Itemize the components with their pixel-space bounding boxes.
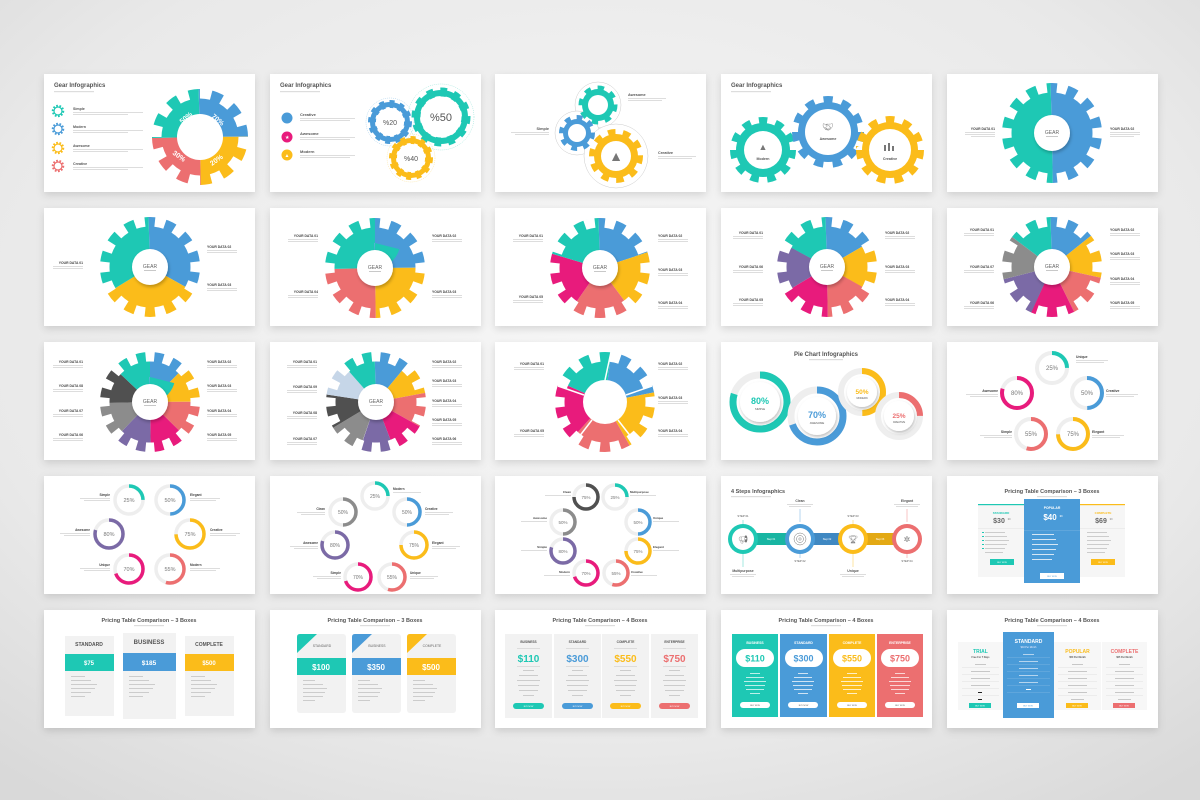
labels: YOUR DATA 02 <box>207 360 231 364</box>
legend list: Modern <box>300 149 315 154</box>
values and labels: Creative <box>210 528 223 532</box>
columns: COMPLETE <box>423 644 442 648</box>
slide 21: pricing 3 boxes <box>44 610 255 728</box>
donut values and labels: Creative <box>1106 389 1119 393</box>
values and labels: Simple <box>100 493 110 497</box>
labels: YOUR DATA 03 <box>1110 252 1134 256</box>
popular column: $40 <box>1043 513 1057 522</box>
standard column: BUY NOW <box>997 562 1007 564</box>
gear: GEAR <box>593 265 607 271</box>
columns: STANDARD <box>569 640 587 644</box>
step labels: Multipurpose <box>732 569 754 573</box>
labels: YOUR DATA 03 <box>207 283 231 287</box>
gears with percentages: %50 <box>430 112 452 124</box>
labels: YOUR DATA 01 <box>59 261 83 265</box>
values and labels: 55% <box>164 567 176 573</box>
legend list: Awesome <box>73 144 90 148</box>
values and labels: 75% <box>581 495 591 500</box>
columns <box>732 634 923 717</box>
values and labels: 50% <box>633 520 643 525</box>
columns: $110 <box>518 654 540 665</box>
slide 2: outline gears <box>270 74 481 192</box>
step labels: Clean <box>795 499 805 503</box>
values and labels: Awesome <box>303 541 318 545</box>
labels: YOUR DATA 02 <box>1110 127 1134 131</box>
values and labels: Creative <box>631 570 643 574</box>
gears: Modern <box>757 157 769 161</box>
columns: $350 <box>367 663 385 672</box>
title: Gear Infographics <box>731 83 783 89</box>
slide 1: gear infographics percentages <box>44 74 255 192</box>
values and labels: Multipurpose <box>630 490 649 494</box>
labels: YOUR DATA 01 <box>739 231 763 235</box>
gear: GEAR <box>820 264 834 270</box>
complete column: $69 <box>1095 518 1107 525</box>
columns: $550 <box>614 654 637 665</box>
labels: YOUR DATA 03 <box>658 396 682 400</box>
values and labels: 25% <box>610 495 620 500</box>
popular column: .99 <box>1059 515 1063 518</box>
labels: YOUR DATA 05 <box>739 298 763 302</box>
legend list <box>282 112 355 160</box>
labels: YOUR DATA 07 <box>970 265 994 269</box>
title: Gear Infographics <box>280 83 332 89</box>
values and labels: 50% <box>164 498 176 504</box>
labels <box>511 93 696 159</box>
columns: POPULAR <box>1065 649 1090 655</box>
labels: Simple <box>537 127 549 131</box>
donut values and labels: Awesome <box>982 389 998 393</box>
labels: YOUR DATA 01 <box>59 360 83 364</box>
columns <box>65 633 234 719</box>
columns: BUY NOW <box>975 706 985 708</box>
donuts: 80% <box>751 396 769 406</box>
labels: YOUR DATA 05 <box>432 418 456 422</box>
values and labels: 50% <box>558 520 568 525</box>
step labels: STEP 04 <box>901 559 913 563</box>
values and labels: 80% <box>330 543 341 549</box>
title: 4 Steps Infographics <box>731 489 785 495</box>
labels <box>513 234 688 309</box>
slide 22: pricing 3 boxes corner <box>270 610 481 728</box>
donuts: CREATIVE <box>893 421 905 424</box>
columns: $550 <box>842 654 862 664</box>
columns: COMPLETE <box>1111 649 1139 655</box>
gears: ▲ <box>609 148 623 164</box>
columns: $185 <box>142 660 157 667</box>
values and labels: 55% <box>611 571 621 576</box>
standard column: STANDARD <box>993 511 1010 515</box>
legend list: Simple <box>73 107 85 111</box>
slide 10: 7-segment gear <box>947 208 1158 326</box>
values and labels: Elegant <box>190 493 202 497</box>
values and labels: 50% <box>402 510 413 516</box>
columns: ENTERPRISE <box>889 641 912 645</box>
gears <box>555 82 648 188</box>
values and labels: Simple <box>537 545 547 549</box>
columns <box>958 632 1147 718</box>
columns: BUY NOW <box>573 706 582 708</box>
columns: BUY NOW <box>750 705 760 707</box>
donuts <box>1002 353 1102 449</box>
legend list: Awesome <box>300 131 319 136</box>
slide 6: 3-segment gear <box>44 208 255 326</box>
donut values and labels: Simple <box>1001 430 1012 434</box>
values and labels: 50% <box>338 510 349 516</box>
slide 16: six donuts <box>44 476 255 594</box>
gear: GEAR <box>369 399 383 405</box>
labels: YOUR DATA 03 <box>207 384 231 388</box>
step labels: STEP 01 <box>737 514 749 518</box>
title: Pricing Table Comparison – 3 Boxes <box>1005 489 1099 495</box>
labels <box>514 362 688 437</box>
labels: YOUR DATA 09 <box>293 385 317 389</box>
columns: BUY NOW <box>1119 706 1129 708</box>
columns: BUY NOW <box>1072 706 1082 708</box>
donuts: AWESOME <box>810 421 824 425</box>
values and labels: 70% <box>123 567 135 573</box>
slide 4: three gears <box>721 74 932 192</box>
labels: YOUR DATA 02 <box>658 362 682 366</box>
labels: YOUR DATA 04 <box>432 399 456 403</box>
step chain: Step 01 <box>767 538 776 541</box>
slide 14: pie chart infographics <box>721 342 932 460</box>
labels <box>288 234 462 298</box>
donut values and labels: 80% <box>1011 391 1024 397</box>
labels: YOUR DATA 06 <box>432 437 456 441</box>
gear <box>330 356 422 448</box>
gears <box>734 100 920 180</box>
donuts: 25% <box>892 413 906 420</box>
complete column: .99 <box>1109 518 1113 521</box>
labels <box>733 231 915 306</box>
gear <box>782 222 872 312</box>
labels: YOUR DATA 02 <box>658 234 682 238</box>
labels: YOUR DATA 04 <box>207 409 231 413</box>
slide 20: pricing 3 boxes popular <box>947 476 1158 594</box>
columns <box>505 634 698 718</box>
values and labels: Modern <box>190 563 202 567</box>
step labels <box>730 499 920 577</box>
slide 11: 8-segment gear <box>44 342 255 460</box>
values and labels: Elegant <box>432 541 444 545</box>
slide 3: interlocked gears <box>495 74 706 192</box>
donut values and labels: 50% <box>1081 391 1094 397</box>
donuts <box>733 371 920 442</box>
labels: YOUR DATA 01 <box>519 234 543 238</box>
step labels: Unique <box>847 569 859 573</box>
columns: STANDARD <box>313 644 332 648</box>
gears: ▲ <box>759 142 767 152</box>
labels: YOUR DATA 02 <box>885 231 909 235</box>
slide 7: 4-segment gear <box>270 208 481 326</box>
donut values and labels: 55% <box>1025 432 1038 438</box>
values and labels <box>60 493 240 573</box>
popular column: POPULAR <box>1044 506 1061 510</box>
columns: $750 <box>663 654 686 665</box>
labels: YOUR DATA 03 <box>885 265 909 269</box>
values and labels: Unique <box>653 516 663 520</box>
legend list: Creative <box>73 162 87 166</box>
values and labels: Clean <box>563 490 571 494</box>
columns: COMPLETE <box>617 640 634 644</box>
values and labels: 75% <box>409 543 420 549</box>
donut values and labels <box>966 355 1138 438</box>
labels: YOUR DATA 02 <box>432 234 456 238</box>
labels: YOUR DATA 06 <box>59 433 83 437</box>
columns: BUY NOW <box>670 706 679 708</box>
slide 8: 5-segment gear <box>495 208 706 326</box>
gear: GEAR <box>143 264 157 270</box>
donut values and labels: Unique <box>1076 355 1088 359</box>
standard column: .99 <box>1007 518 1011 521</box>
title: Gear Infographics <box>54 83 106 89</box>
values and labels: 70% <box>353 575 364 581</box>
columns: BUY NOW <box>895 705 905 707</box>
columns: STANDARD <box>794 641 813 645</box>
columns: BUY NOW <box>847 705 857 707</box>
gear <box>554 222 646 314</box>
complete column <box>1080 504 1125 577</box>
labels: YOUR DATA 04 <box>658 301 682 305</box>
slide 24: pricing 4 boxes colored <box>721 610 932 728</box>
big gear: 50% <box>179 111 195 126</box>
labels: YOUR DATA 04 <box>885 298 909 302</box>
step chain: 🏆︎ <box>848 535 858 544</box>
gears with percentages: %40 <box>404 156 418 163</box>
donuts <box>322 483 427 590</box>
values and labels: Clean <box>316 507 325 511</box>
title: Pricing Table Comparison – 3 Boxes <box>328 618 422 624</box>
labels: YOUR DATA 03 <box>658 268 682 272</box>
title: Pricing Table Comparison – 3 Boxes <box>102 618 196 624</box>
columns: TRIAL <box>973 649 988 655</box>
slide 5: two-segment gear <box>947 74 1158 192</box>
values and labels: Awesome <box>75 528 90 532</box>
slide 25: pricing 4 boxes trial <box>947 610 1158 728</box>
columns: $500 <box>422 663 440 672</box>
donut values and labels: 25% <box>1046 366 1059 372</box>
title: Pie Chart Infographics <box>794 352 859 358</box>
labels: YOUR DATA 01 <box>520 362 544 366</box>
labels: YOUR DATA 04 <box>294 290 318 294</box>
columns: $50 Per Month <box>1069 656 1086 659</box>
big gear <box>156 94 244 180</box>
donuts: MODERN <box>856 397 868 400</box>
step labels: STEP 03 <box>847 514 859 518</box>
slide 17: seven donuts <box>270 476 481 594</box>
values and labels: 75% <box>184 532 196 538</box>
values and labels: Modern <box>559 570 570 574</box>
slide 18: eight donuts <box>495 476 706 594</box>
popular column: BUY NOW <box>1047 576 1057 578</box>
title: Pricing Table Comparison – 4 Boxes <box>553 618 647 624</box>
columns: BUSINESS <box>134 640 164 646</box>
gear: GEAR <box>1045 130 1059 136</box>
values and labels: 80% <box>558 549 568 554</box>
gear <box>1006 88 1098 178</box>
values and labels: 25% <box>370 494 381 500</box>
columns: $300 <box>566 654 589 665</box>
title: Pricing Table Comparison – 4 Boxes <box>1005 618 1099 624</box>
step chain: Step 03 <box>876 538 885 541</box>
values and labels <box>521 490 679 576</box>
slide 13: puzzle gear <box>495 342 706 460</box>
labels: YOUR DATA 01 <box>970 228 994 232</box>
big gear: 20% <box>209 153 225 168</box>
columns: BUY NOW <box>524 706 533 708</box>
labels: YOUR DATA 04 <box>1110 277 1134 281</box>
values and labels: 80% <box>103 532 115 538</box>
values and labels <box>290 487 460 581</box>
columns: $500 <box>202 661 216 667</box>
labels: YOUR DATA 05 <box>520 429 544 433</box>
values and labels: 75% <box>633 549 643 554</box>
step chain: Step 02 <box>823 538 832 541</box>
values and labels: Elegant <box>653 545 664 549</box>
gears with percentages <box>366 84 474 182</box>
donut values and labels: Elegant <box>1092 430 1105 434</box>
columns: $65 Per Month <box>1116 656 1133 659</box>
donuts: 50% <box>855 389 869 396</box>
gear <box>558 352 652 448</box>
values and labels: 70% <box>581 571 591 576</box>
columns <box>297 634 456 713</box>
donuts <box>551 485 650 585</box>
legend list: ▲ <box>285 153 289 159</box>
slide 23: pricing 4 boxes light <box>495 610 706 728</box>
values and labels: 25% <box>123 498 135 504</box>
labels: YOUR DATA 06 <box>970 301 994 305</box>
values and labels: Unique <box>99 563 110 567</box>
labels: YOUR DATA 06 <box>739 265 763 269</box>
labels: YOUR DATA 01 <box>971 127 995 131</box>
labels: YOUR DATA 02 <box>432 360 456 364</box>
step labels: Elegant <box>901 499 914 503</box>
slide 12: 9-segment gear <box>270 342 481 460</box>
labels: YOUR DATA 02 <box>207 245 231 249</box>
donuts: 70% <box>808 410 826 420</box>
columns: BUY NOW <box>621 706 630 708</box>
values and labels: Creative <box>425 507 438 511</box>
labels: YOUR DATA 03 <box>432 379 456 383</box>
columns: BUSINESS <box>746 641 764 645</box>
complete column: COMPLETE <box>1095 511 1111 515</box>
labels <box>964 228 1140 309</box>
labels <box>53 245 237 291</box>
step chain <box>728 524 922 554</box>
standard column: $30 <box>993 518 1005 525</box>
columns: $300 <box>793 654 814 664</box>
columns: BUSINESS <box>368 644 386 648</box>
columns: $40 Per Month <box>1021 646 1037 649</box>
legend list: ★ <box>285 135 290 141</box>
donuts <box>95 486 204 583</box>
big gear: 30% <box>171 150 187 164</box>
columns: Free For 7 Days <box>972 656 990 659</box>
gears: Awesome <box>820 137 836 141</box>
labels: YOUR DATA 08 <box>293 411 317 415</box>
columns: BUY NOW <box>799 705 808 707</box>
step chain: 📢︎ <box>738 535 748 544</box>
slide 19: 4 steps infographics <box>721 476 932 594</box>
gear <box>330 222 420 314</box>
gear: GEAR <box>1045 264 1059 270</box>
columns: $750 <box>890 654 910 664</box>
step chain: ✲ <box>904 535 911 544</box>
labels <box>53 360 237 441</box>
labels: Creative <box>658 151 673 155</box>
gears: Creative <box>883 157 897 161</box>
values and labels: Simple <box>331 571 341 575</box>
labels <box>287 360 462 445</box>
gears with percentages: %20 <box>383 120 397 127</box>
columns: COMPLETE <box>195 642 224 648</box>
gear: GEAR <box>143 399 157 405</box>
donuts: SIMPLE <box>755 407 765 411</box>
popular column <box>1024 499 1080 583</box>
columns: $100 <box>312 663 330 672</box>
columns: STANDARD <box>75 642 103 648</box>
big gear: 70% <box>210 113 226 128</box>
labels: YOUR DATA 05 <box>207 433 231 437</box>
labels: YOUR DATA 08 <box>59 384 83 388</box>
labels: YOUR DATA 05 <box>1110 301 1134 305</box>
donut values and labels: 75% <box>1067 432 1080 438</box>
labels <box>965 127 1140 137</box>
slide 15: five donuts <box>947 342 1158 460</box>
columns: COMPLETE <box>843 641 862 645</box>
gears: 🤝︎ <box>822 122 834 132</box>
title: Pricing Table Comparison – 4 Boxes <box>779 618 873 624</box>
labels: YOUR DATA 05 <box>519 295 543 299</box>
step labels: STEP 02 <box>794 559 806 563</box>
values and labels: Awesome <box>533 516 547 520</box>
slide 9: 6-segment gear <box>721 208 932 326</box>
columns: ENTERPRISE <box>664 640 685 644</box>
labels: Awesome <box>628 93 646 97</box>
complete column: BUY NOW <box>1098 562 1108 564</box>
labels: YOUR DATA 07 <box>59 409 83 413</box>
legend list: Modern <box>73 125 86 129</box>
standard column <box>978 504 1024 577</box>
columns: BUY NOW <box>1023 706 1033 708</box>
gear <box>1006 222 1098 312</box>
labels: YOUR DATA 07 <box>293 437 317 441</box>
labels: YOUR DATA 03 <box>432 290 456 294</box>
values and labels: Unique <box>410 571 421 575</box>
columns: $110 <box>745 654 765 664</box>
labels: YOUR DATA 04 <box>658 429 682 433</box>
values and labels: 55% <box>387 575 398 581</box>
values and labels: Modern <box>393 487 405 491</box>
labels: YOUR DATA 02 <box>1110 228 1134 232</box>
columns: BUSINESS <box>520 640 537 644</box>
labels: YOUR DATA 01 <box>293 360 317 364</box>
gear <box>104 356 196 448</box>
labels: YOUR DATA 01 <box>294 234 318 238</box>
legend list: Creative <box>300 112 317 117</box>
legend list <box>53 106 143 171</box>
columns: $75 <box>84 661 95 667</box>
gear <box>104 222 196 312</box>
gear: GEAR <box>368 265 382 271</box>
columns: STANDARD <box>1015 639 1043 645</box>
